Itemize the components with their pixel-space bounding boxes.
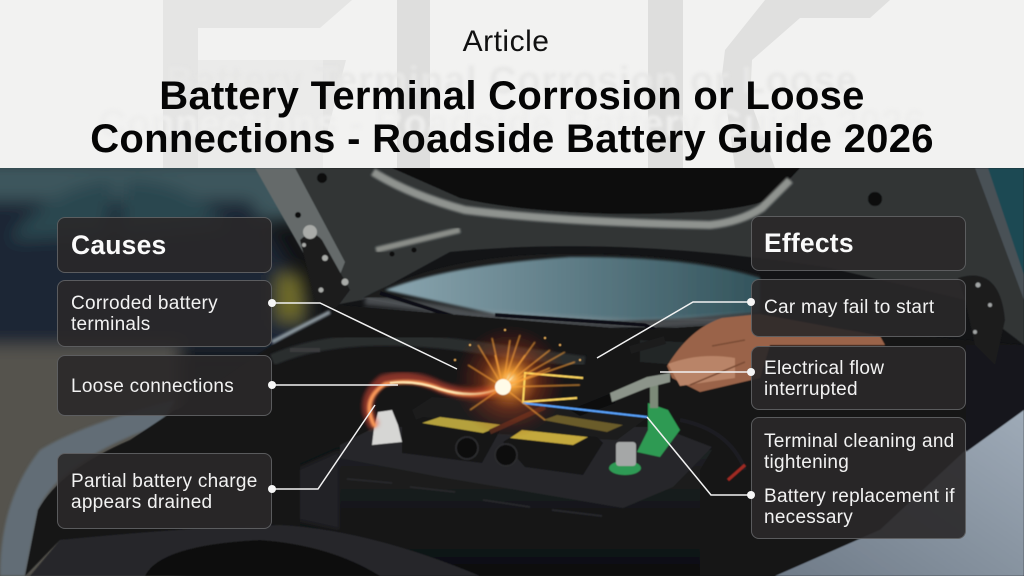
panel: partial battery charge: appears drained: [71, 492, 212, 512]
panel: remedies: necessary: [764, 507, 853, 528]
connector lines: [272, 302, 751, 495]
panel: partial battery charge: Partial battery charge: [71, 470, 258, 492]
hood highlight stripe: [373, 172, 790, 225]
dark hood insulation panel: [392, 168, 800, 214]
panel: partial battery charge: [57, 453, 272, 529]
ghost title echo: Connections - Roadside Battery Guide 2026: [99, 103, 925, 145]
panel: remedies: [751, 417, 966, 539]
panel: remedies: tightening Battery replacement if: [764, 452, 955, 507]
engine bay: [60, 305, 1024, 576]
title: [90, 74, 934, 161]
title: Connections - Roadside Battery Guide 2026: [90, 117, 934, 161]
kicker: Article: [463, 25, 549, 58]
panel: effects heading: Effects: [764, 228, 854, 258]
battery terminals: [372, 410, 402, 445]
watermark letters: [163, 0, 890, 168]
panel: corroded battery terminals: Corroded battery: [71, 293, 218, 314]
battery front vents: [347, 479, 602, 516]
title: Battery Terminal Corrosion or Loose: [159, 74, 865, 118]
panel: electrical flow interrupted: Electrical flow: [764, 358, 884, 378]
panel: corroded battery terminals: terminals: [71, 314, 151, 335]
battery clamp and cable: [570, 393, 615, 416]
panel: electrical flow interrupted: interrupted: [764, 378, 858, 400]
battery: [340, 397, 712, 576]
teal sky corner: [975, 168, 1024, 320]
hand and arm: [667, 314, 885, 392]
windshield: [363, 254, 760, 320]
header band: [0, 0, 1024, 168]
radiator cover: [30, 525, 480, 576]
panel: causes heading: Causes: [71, 230, 166, 260]
panel: corroded battery terminals: [57, 280, 272, 347]
ghost title echo: [99, 60, 925, 145]
panel: remedies: Terminal cleaning and: [764, 431, 955, 452]
left fender: [0, 400, 175, 576]
hood holes: [295, 173, 882, 256]
ghost title echo: Battery Terminal Corrosion or Loose: [166, 60, 858, 102]
hood hinge with bolts: [300, 234, 350, 310]
panel: car may fail to start: Car may fail to start: [764, 296, 934, 318]
background: blurred street and parked car: [0, 160, 320, 576]
hood hinge bracket: [958, 276, 1005, 365]
right fender: [775, 408, 1024, 576]
wipers: [380, 293, 690, 345]
spark glow and energy trail: [368, 322, 647, 438]
panel: car may fail to start: [751, 279, 966, 337]
open hood underside: [255, 168, 1024, 345]
panel: causes heading: [57, 217, 272, 273]
panel: loose connections: [57, 355, 272, 416]
panel: electrical flow interrupted: [751, 346, 966, 410]
panel: effects heading: [751, 216, 966, 271]
panel: loose connections: Loose connections: [71, 376, 234, 396]
